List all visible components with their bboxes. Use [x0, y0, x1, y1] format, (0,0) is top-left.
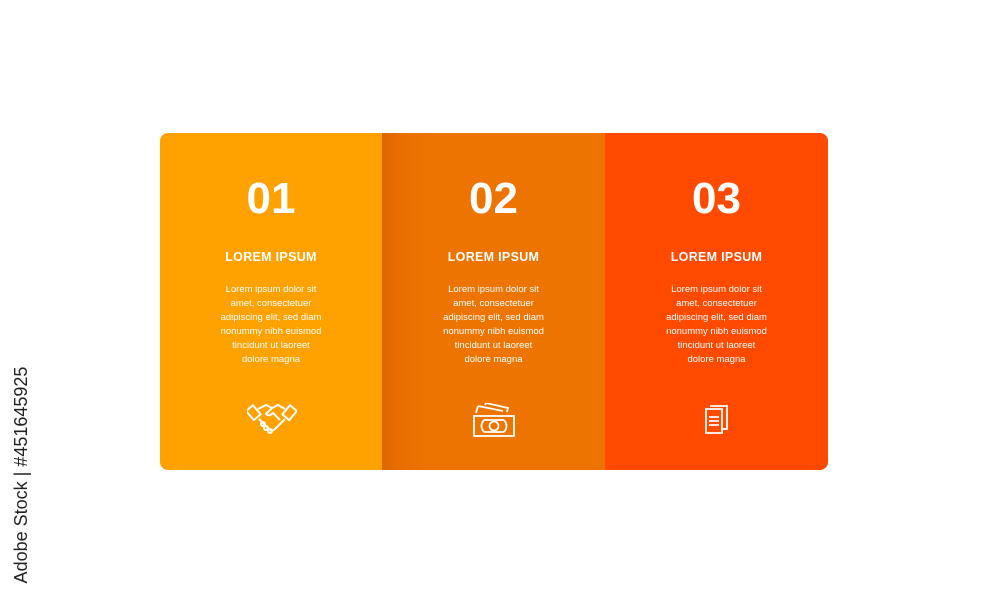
body text 01	[221, 284, 321, 365]
body text 01: Lorem ipsum dolor sit	[226, 284, 316, 295]
infographic: three panels	[160, 133, 828, 470]
body text 02: dolore magna	[464, 354, 523, 365]
body text 03: tincidunt ut laoreet	[678, 340, 755, 351]
body text 03: nonummy nibh euismod	[666, 326, 767, 337]
body text 02: tincidunt ut laoreet	[455, 340, 532, 351]
heading 03: LOREM IPSUM	[671, 250, 762, 264]
body text 03: adipiscing elit, sed diam	[666, 312, 767, 323]
body text 01: adipiscing elit, sed diam	[221, 312, 321, 323]
body text 01: amet, consectetuer	[231, 298, 311, 309]
number 02: 02	[469, 174, 518, 223]
number 01: 01	[247, 174, 295, 223]
body text 02: adipiscing elit, sed diam	[443, 312, 544, 323]
body text 03: amet, consectetuer	[676, 298, 757, 309]
body text 01: nonummy nibh euismod	[221, 326, 321, 337]
icon: documents	[705, 405, 728, 434]
icon: money	[473, 403, 515, 437]
body text 02	[443, 284, 544, 365]
heading 02: LOREM IPSUM	[448, 250, 539, 264]
icon: handshake	[247, 404, 297, 434]
panel: 02	[382, 133, 605, 470]
number 03: 03	[692, 174, 741, 223]
body text 03: Lorem ipsum dolor sit	[671, 284, 762, 295]
body text 03: dolore magna	[687, 354, 746, 365]
body text 01: dolore magna	[242, 354, 300, 365]
heading 01: LOREM IPSUM	[225, 250, 317, 264]
watermark text: Adobe Stock | #451645925	[11, 367, 31, 583]
panel: 01	[160, 133, 382, 470]
body text 03	[666, 284, 767, 365]
panel: 03	[605, 133, 828, 470]
body text 02: amet, consectetuer	[453, 298, 534, 309]
body text 02: Lorem ipsum dolor sit	[448, 284, 539, 295]
body text 01: tincidunt ut laoreet	[232, 340, 310, 351]
body text 02: nonummy nibh euismod	[443, 326, 544, 337]
